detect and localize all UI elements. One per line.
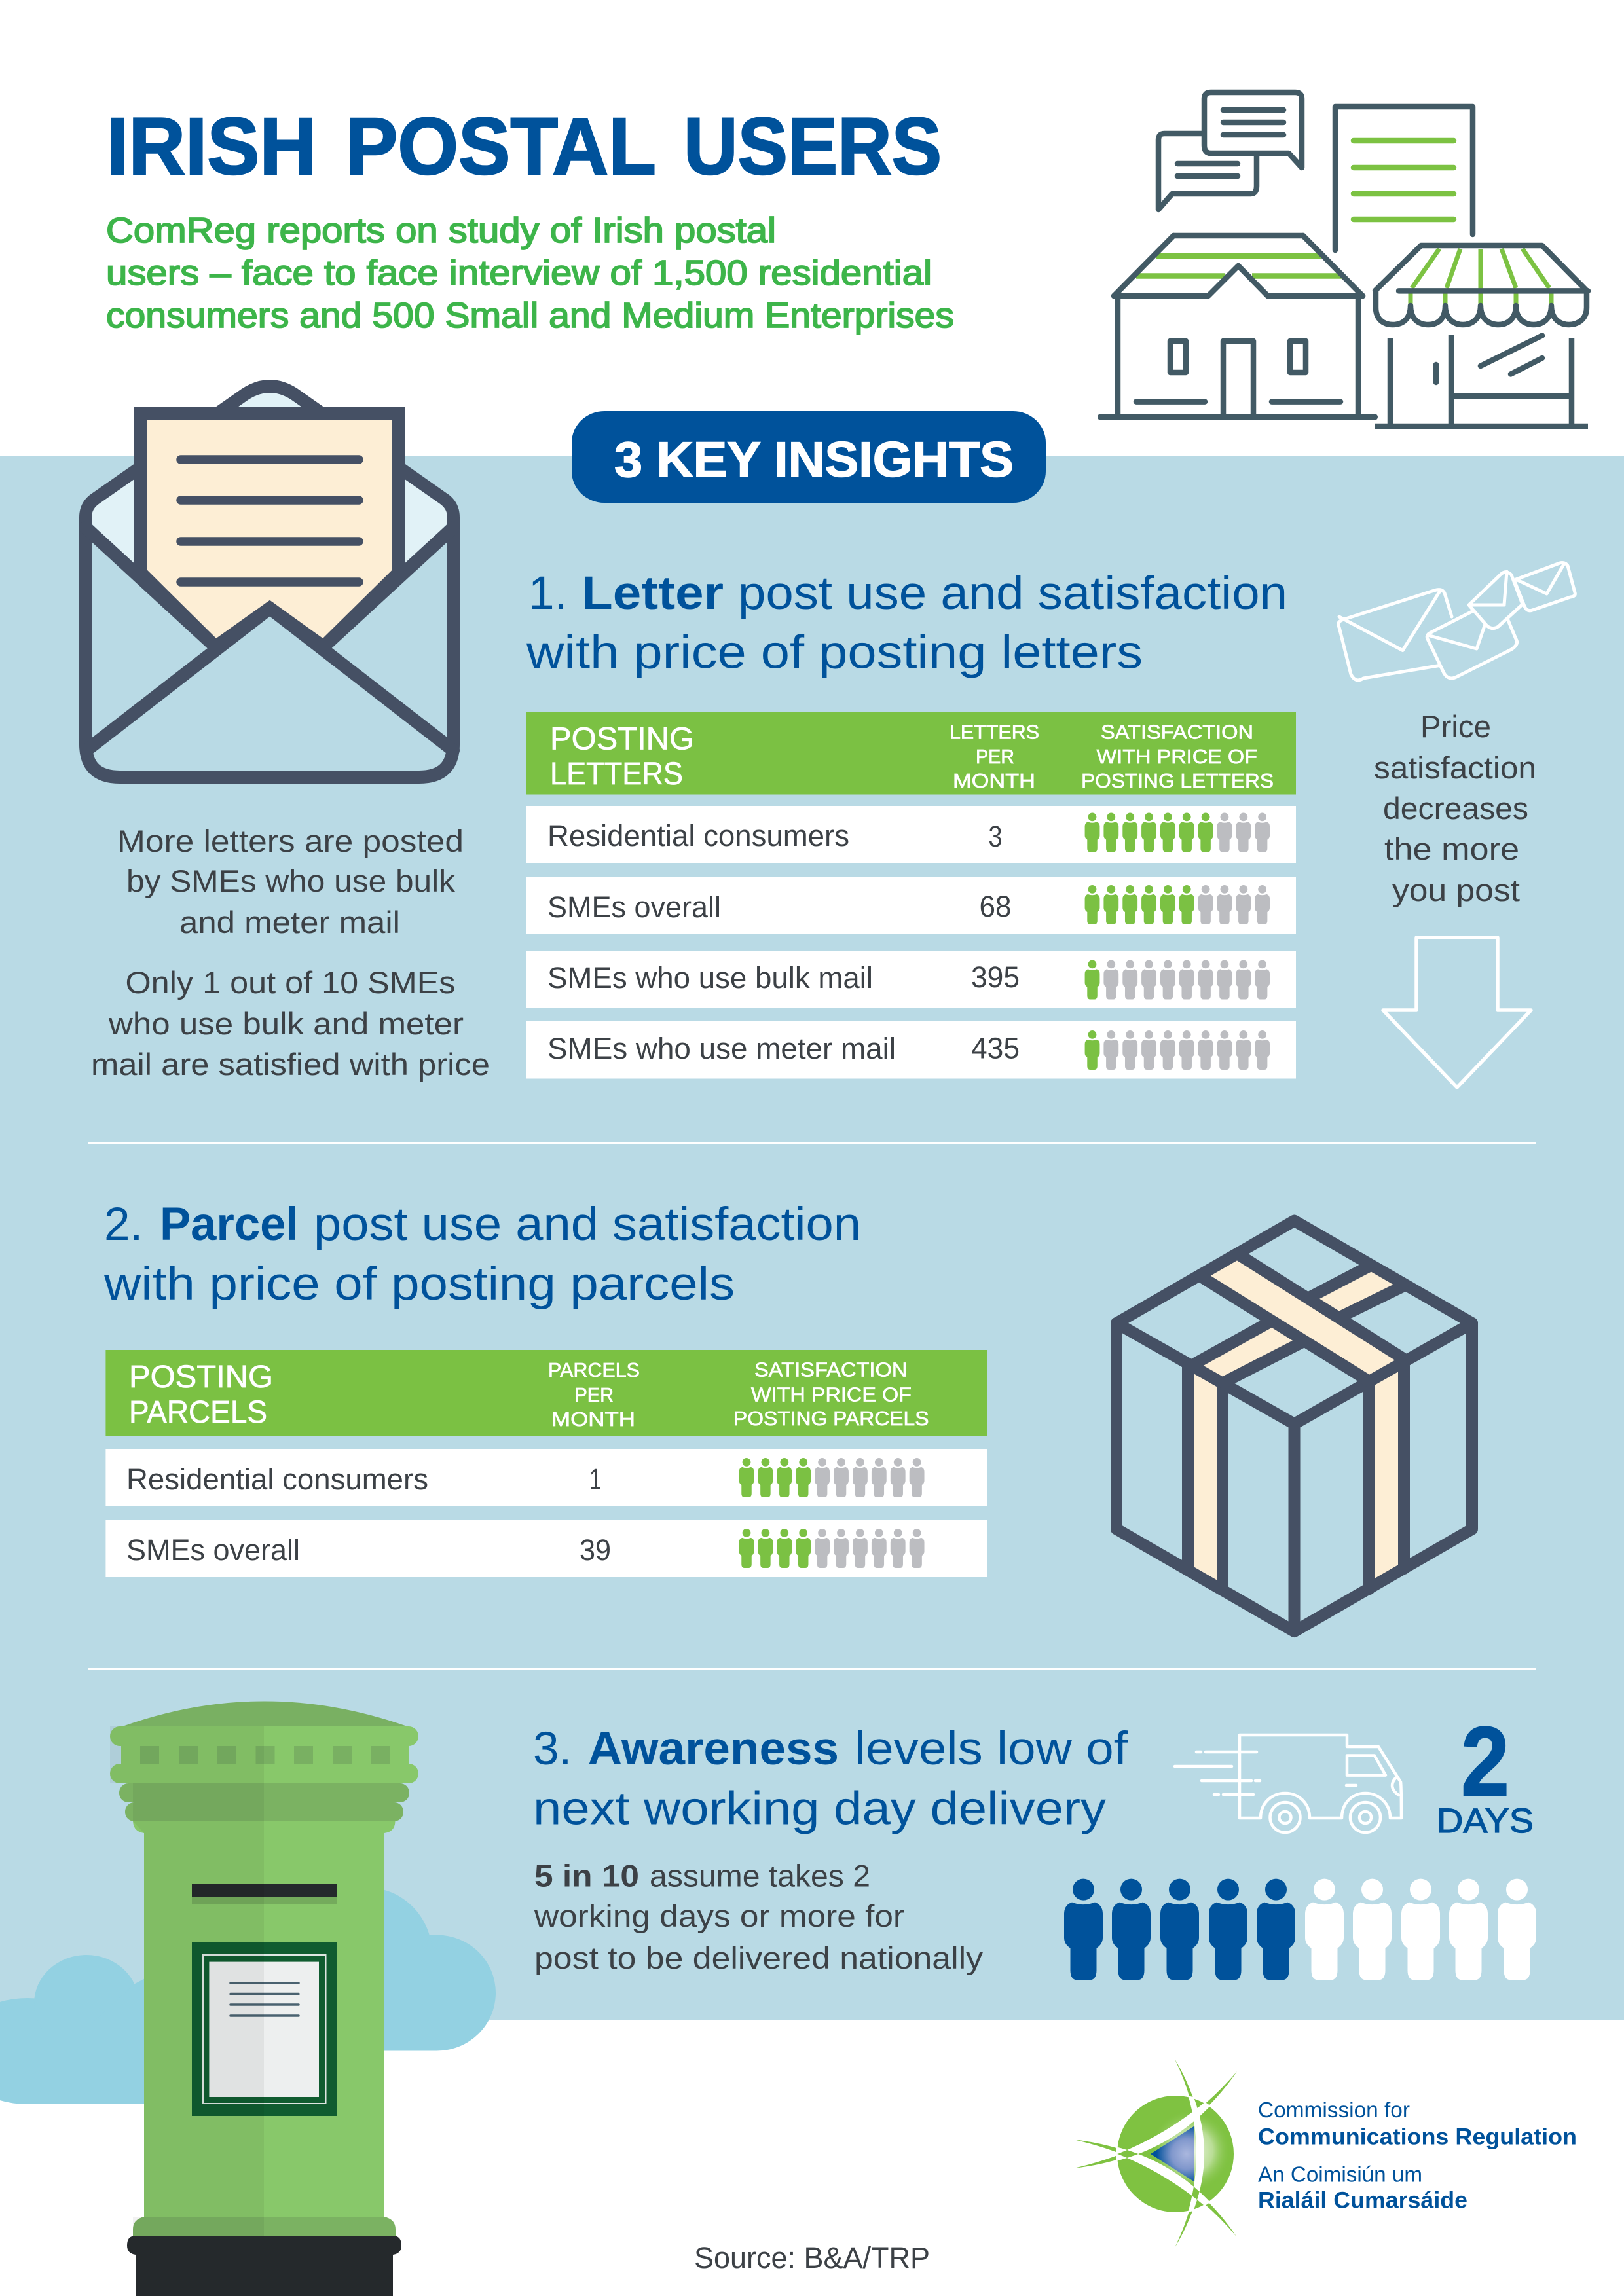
table header: POSTING <box>550 722 694 757</box>
row: SMEs overall <box>526 877 1296 934</box>
title <box>107 102 942 192</box>
title: IRISH <box>107 102 316 192</box>
satisfaction icons: 6 of 10 <box>1085 885 1270 924</box>
table header: MONTH <box>551 1408 635 1430</box>
icon: parcel box <box>1116 1221 1472 1631</box>
body <box>133 1821 396 2217</box>
heading: section 1: post use and satisfaction <box>738 568 1287 619</box>
table header: LETTERS <box>950 720 1039 744</box>
text block: price note: satisfaction <box>1374 750 1536 785</box>
row: residential consumers <box>105 1449 987 1506</box>
base <box>127 2236 401 2296</box>
table header <box>526 712 1296 795</box>
text block: letters note: Only 1 out of 10 SMEs <box>126 965 456 1000</box>
icon: house <box>1101 236 1375 417</box>
blue people <box>1064 1879 1295 1980</box>
row: SMEs overall <box>105 1520 987 1577</box>
satisfaction icons: 1 of 10 <box>1085 1030 1270 1070</box>
rings <box>119 1783 409 1802</box>
left shade <box>110 1726 264 2236</box>
satisfaction icons: 1 of 10 <box>1085 960 1270 999</box>
subtitle: ComReg reports on study of Irish postal <box>106 211 776 250</box>
logo text: Rialáil Cumarsáide <box>1258 2188 1467 2214</box>
logo: ComReg mark <box>1073 2059 1237 2248</box>
icon: speech bubble lines <box>1177 110 1283 176</box>
table header: WITH PRICE OF <box>751 1383 912 1406</box>
table header: LETTERS <box>550 757 683 792</box>
heading: section 2: 2. <box>104 1199 143 1250</box>
logo text: Communications Regulation <box>1258 2124 1577 2150</box>
heading: section 3: Awareness <box>588 1723 839 1775</box>
logo text: An Coimisiún um <box>1258 2162 1422 2187</box>
subtitle <box>106 211 954 335</box>
title: POSTAL <box>346 102 656 192</box>
heading: section 2: with price of posting parcels <box>103 1258 735 1310</box>
source: Source: B&A/TRP <box>694 2241 930 2274</box>
table header: POSTING <box>129 1360 273 1394</box>
text block: awareness note: post to be delivered nationally <box>534 1941 984 1975</box>
heading: section 1: Letter <box>581 568 724 619</box>
header illustration <box>1101 92 1588 426</box>
icon: flying envelopes <box>1338 563 1575 680</box>
text block: price note: you post <box>1392 873 1520 907</box>
heading: section 2: Parcel <box>160 1199 299 1250</box>
row: SMEs overall: SMEs overall <box>547 890 721 924</box>
row: residential consumers <box>526 806 1296 863</box>
table header: PARCELS <box>129 1395 267 1430</box>
row: residential consumers: 3 <box>989 820 1002 853</box>
white people <box>1305 1879 1536 1980</box>
notice lines <box>231 1983 299 2016</box>
row: SMEs who use meter mail: 435 <box>971 1032 1020 1065</box>
table: posting letters <box>526 712 1296 1079</box>
text block: awareness note: working days or more for <box>534 1899 904 1933</box>
icon: shop <box>1375 246 1588 426</box>
table header: SATISFACTION <box>754 1358 908 1381</box>
table header: PER <box>575 1383 614 1406</box>
heading: section 3 <box>533 1723 1128 1835</box>
text block: price note <box>1374 709 1536 907</box>
heading: section 1 <box>526 568 1287 678</box>
arrow: down <box>1383 938 1531 1087</box>
satisfaction icons: 4 of 10 <box>739 1529 925 1568</box>
heading: section 2 <box>103 1199 861 1310</box>
cap <box>110 1726 418 1783</box>
title: USERS <box>684 102 942 192</box>
row: SMEs overall: SMEs overall <box>126 1533 300 1567</box>
table header: MONTH <box>953 769 1035 792</box>
icon: shop awning stripes <box>1411 249 1551 304</box>
icon: document <box>1335 107 1473 250</box>
icon: front speech bubble <box>1204 92 1302 168</box>
bottom ring <box>133 2217 396 2236</box>
text block: awareness note: assume takes 2 <box>650 1859 870 1893</box>
text block: price note: decreases <box>1383 791 1528 826</box>
table header: PER <box>976 745 1014 768</box>
background panel <box>0 456 1624 2020</box>
key insights badge: 3 KEY INSIGHTS <box>614 432 1014 488</box>
table header: POSTING LETTERS <box>1081 769 1274 792</box>
row: residential consumers: 1 <box>589 1463 601 1496</box>
text block: price note: Price <box>1420 709 1491 744</box>
icon: back speech bubble <box>1158 134 1257 210</box>
text block: awareness note <box>534 1859 984 1975</box>
cap squares <box>140 1746 390 1764</box>
table: posting parcels <box>105 1350 987 1577</box>
dome <box>122 1701 407 1726</box>
text block: awareness note: 5 in 10 <box>534 1859 639 1893</box>
key insights badge <box>572 411 1046 503</box>
slot <box>192 1897 337 1904</box>
heading: section 1: with price of posting letters <box>526 627 1143 678</box>
subtitle: users – face to face interview of 1,500 residential <box>106 253 932 293</box>
heading: section 2: post use and satisfaction <box>314 1199 861 1250</box>
text block: letters note: and meter mail <box>179 905 400 939</box>
subtitle: consumers and 500 Small and Medium Enterprises <box>106 296 954 335</box>
row: SMEs who use bulk mail: 395 <box>971 960 1020 994</box>
heading: section 3: levels low of <box>855 1723 1128 1775</box>
logo text <box>1258 2098 1577 2214</box>
row: SMEs who use bulk mail <box>526 951 1296 1008</box>
stat: 2 days <box>1437 1706 1534 1840</box>
row: residential consumers: Residential consumers <box>126 1463 428 1496</box>
clouds <box>0 1887 496 2104</box>
logo text: Commission for <box>1258 2098 1410 2122</box>
icon: house roof stripes <box>1136 256 1342 276</box>
row: SMEs overall: 68 <box>980 890 1011 923</box>
icon: delivery van <box>1175 1735 1401 1832</box>
table header: SATISFACTION <box>1101 720 1253 744</box>
satisfaction icons: 4 of 10 <box>739 1458 925 1497</box>
notice frame <box>192 1942 337 2116</box>
table header <box>105 1350 987 1436</box>
stat: 2 days: 2 <box>1461 1706 1509 1816</box>
row: SMEs who use bulk mail: SMEs who use bulk mail <box>547 961 873 994</box>
divider <box>88 1142 1536 1144</box>
satisfaction icons: 7 of 10 <box>1085 813 1270 852</box>
heading: section 1: 1. <box>528 568 567 619</box>
text block: letters note: who use bulk and meter <box>108 1006 464 1041</box>
divider <box>88 1668 1536 1670</box>
text block: letters note: by SMEs who use bulk <box>126 864 456 898</box>
stat: 2 days: DAYS <box>1437 1802 1534 1840</box>
text block: price note: the more <box>1384 831 1519 866</box>
text block: letters note: More letters are posted <box>117 824 464 858</box>
text block: letters note <box>91 824 490 1082</box>
row: residential consumers: Residential consumers <box>547 819 849 852</box>
icon: open envelope with letter <box>86 386 453 777</box>
row: SMEs who use meter mail: SMEs who use meter mail <box>547 1032 896 1065</box>
heading: section 3: next working day delivery <box>533 1783 1107 1835</box>
table header: PARCELS <box>548 1358 640 1381</box>
table header: POSTING PARCELS <box>733 1407 929 1430</box>
heading: section 3: 3. <box>533 1723 572 1775</box>
table header: WITH PRICE OF <box>1096 745 1257 768</box>
row: SMEs who use meter mail <box>526 1021 1296 1079</box>
icon: document lines <box>1354 141 1454 219</box>
row: SMEs overall: 39 <box>580 1533 611 1567</box>
pictogram: 5 in 10 people <box>1064 1879 1536 1980</box>
text block: letters note: mail are satisfied with price <box>91 1047 490 1082</box>
icon: green post box <box>110 1701 418 2296</box>
